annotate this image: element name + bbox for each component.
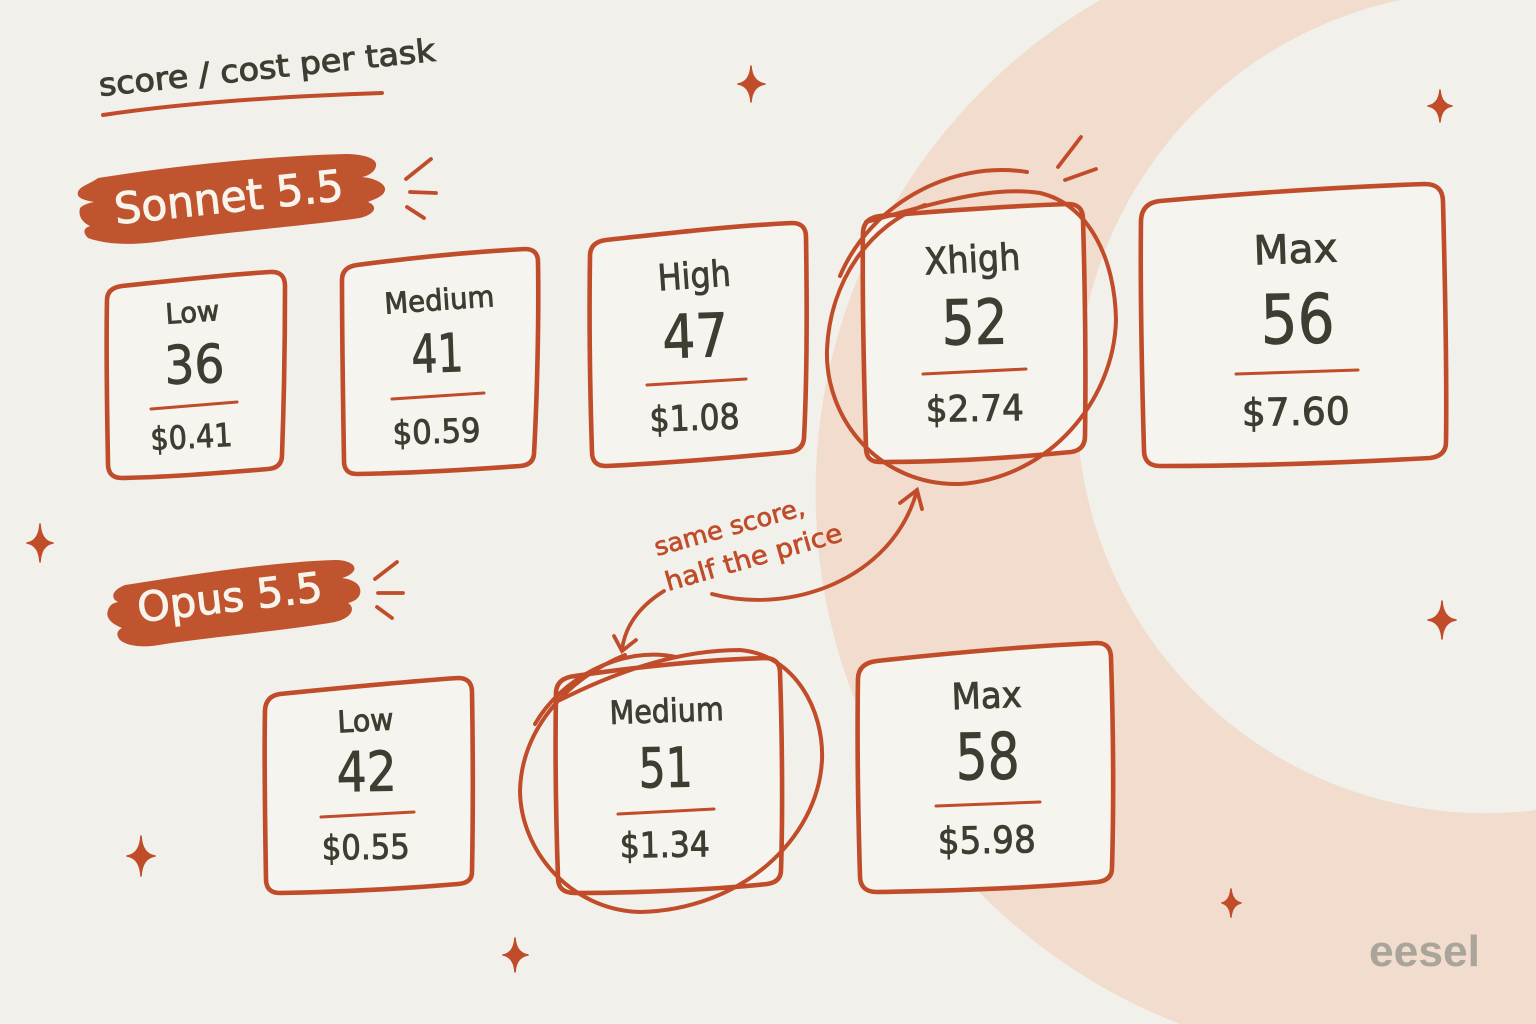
- card: Sonnet High: High: [656, 254, 732, 300]
- heading: score / cost per task: [97, 32, 438, 115]
- label: Sonnet 5.5: Sonnet 5.5: [112, 161, 346, 235]
- card: Opus Low: [265, 678, 473, 893]
- card: Sonnet Low: [107, 272, 285, 478]
- card: Sonnet Max: $7.60: [1241, 389, 1350, 435]
- card: Opus Max: [858, 643, 1113, 892]
- hand-drawn circle: Sonnet Xhigh: [827, 170, 1116, 484]
- card: Sonnet Max: Max: [1253, 226, 1338, 274]
- sparkle: [1428, 601, 1456, 639]
- sparkle: [503, 938, 528, 972]
- sparkle: [1428, 90, 1452, 122]
- card: Sonnet Xhigh: 52: [941, 285, 1008, 360]
- card: Opus Max: 58: [955, 720, 1020, 796]
- card: Sonnet Medium: [342, 249, 538, 474]
- card: Opus Medium: 51: [638, 736, 693, 800]
- background crescent: [816, 0, 1536, 1024]
- sparkle: [127, 836, 155, 876]
- accent ticks: Xhigh: [1058, 137, 1096, 180]
- label: Opus 5.5: Opus 5.5: [135, 563, 325, 632]
- arrow: to Sonnet Xhigh: [712, 490, 922, 600]
- annotation: same score, half the price: same score,: [651, 492, 808, 562]
- card: Sonnet Max: 56: [1260, 280, 1335, 361]
- card: Sonnet High: $1.08: [649, 397, 740, 441]
- card: Opus Max: Max: [951, 675, 1022, 718]
- card: Sonnet High: [590, 223, 807, 466]
- heading: score / cost per task: score / cost per task: [97, 32, 438, 104]
- card: Opus Low: Low: [337, 703, 394, 740]
- card: Sonnet Medium: Medium: [383, 279, 495, 321]
- card: Sonnet High: 47: [661, 301, 730, 373]
- card: Sonnet Max: [1141, 184, 1446, 466]
- card: Sonnet Medium: 41: [410, 323, 464, 386]
- sparkle: [1222, 889, 1241, 917]
- card: Sonnet Xhigh: Xhigh: [923, 236, 1021, 283]
- card: Opus Low: $0.55: [321, 827, 410, 869]
- accent ticks: Opus: [375, 562, 403, 618]
- hand-drawn circle: Opus Medium: [520, 650, 822, 912]
- card: Sonnet Xhigh: [863, 204, 1085, 462]
- annotation: same score, half the price: [651, 492, 846, 598]
- card: Opus Max: $5.98: [937, 818, 1036, 863]
- label: Opus 5.5: [107, 560, 360, 646]
- card: Opus Low: 42: [336, 739, 397, 805]
- card: Opus Medium: $1.34: [619, 825, 710, 867]
- card: Sonnet Low: $0.41: [149, 416, 233, 458]
- arrow: to Opus Medium: [614, 591, 664, 651]
- card: Sonnet Low: 36: [163, 334, 225, 397]
- card: Opus Medium: [556, 658, 782, 893]
- annotation: same score, half the price: half the price: [662, 518, 846, 598]
- sparkle: [738, 66, 765, 102]
- label: Sonnet 5.5: [78, 154, 385, 244]
- card: Opus Medium: Medium: [609, 690, 724, 732]
- card: Sonnet Low: Low: [164, 294, 220, 331]
- logo: eesel: eesel: [1369, 927, 1480, 976]
- card: Sonnet Medium: $0.59: [392, 410, 481, 453]
- accent ticks: Sonnet: [406, 159, 436, 218]
- sparkle: [27, 524, 53, 562]
- card: Sonnet Xhigh: $2.74: [925, 388, 1024, 431]
